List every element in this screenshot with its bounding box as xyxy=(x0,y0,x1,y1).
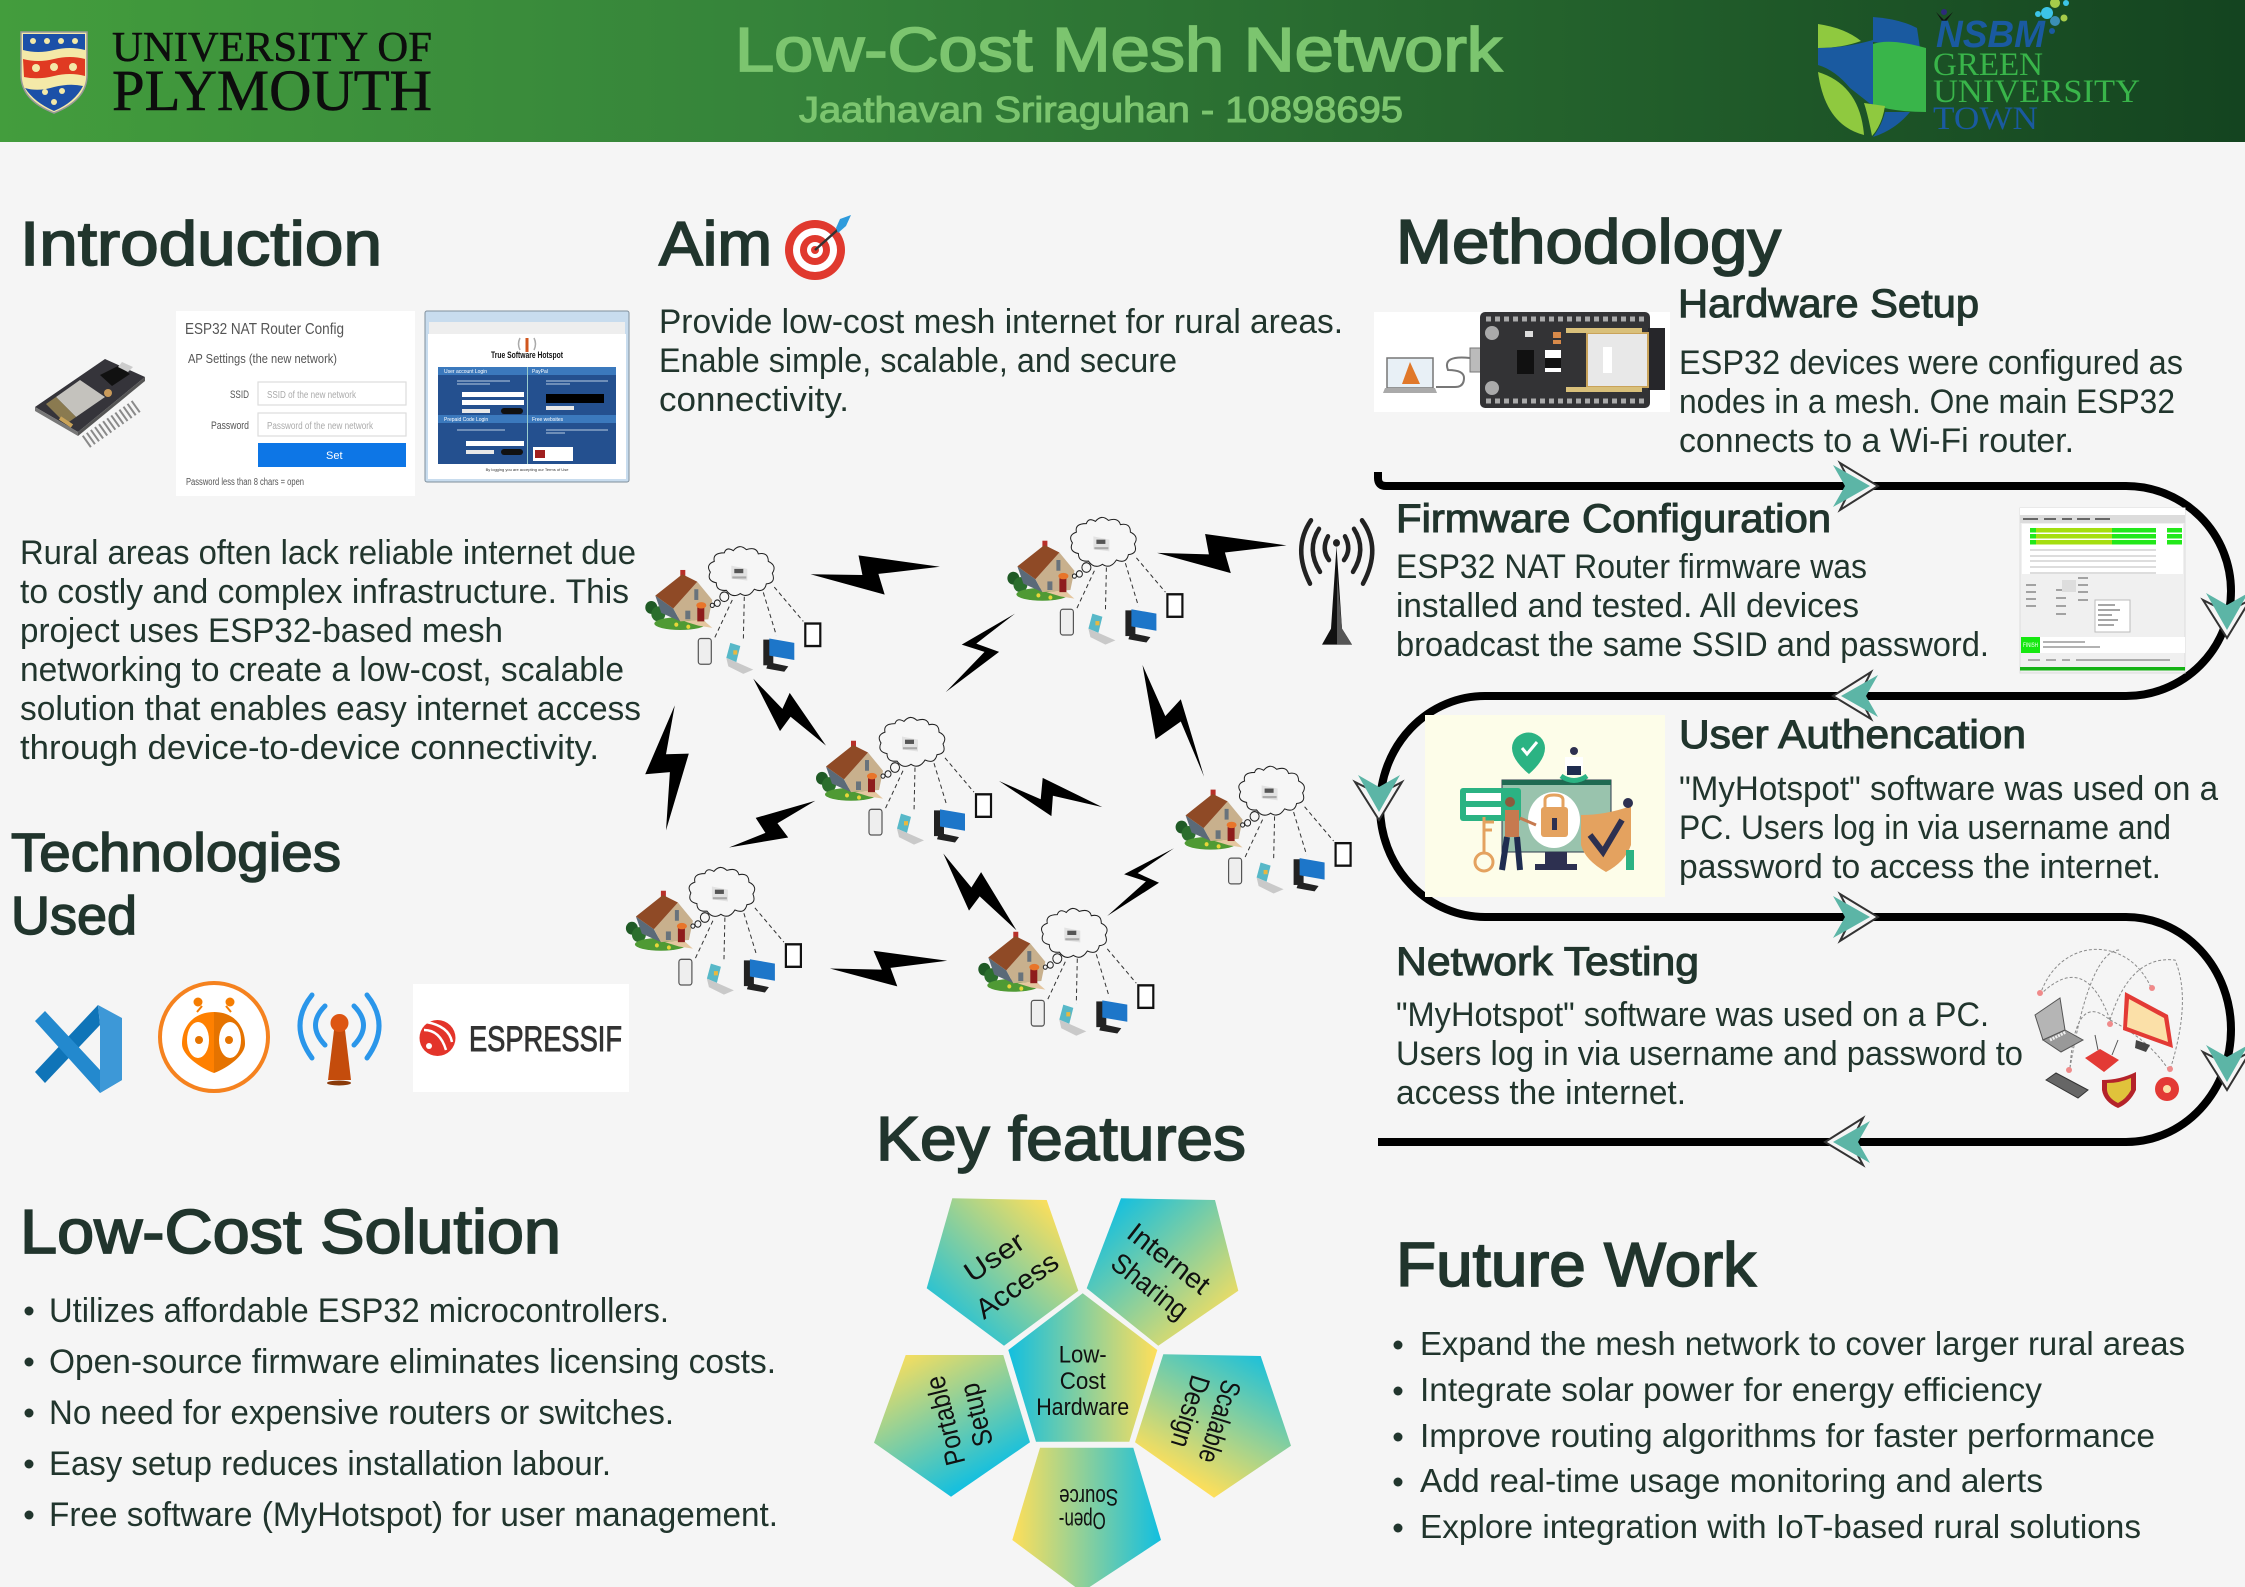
panel: aim xyxy=(659,210,1343,419)
text: hardware setup description: ESP32 devices were configured as xyxy=(1679,344,2183,382)
logo: NSBM Green University Town: TOWN xyxy=(1933,101,2038,137)
panel: introduction xyxy=(20,210,641,767)
arrow: left bottom xyxy=(1825,1118,1870,1165)
icon: Espressif logo xyxy=(413,984,629,1092)
image: MyHotspot login screenshot: Free websites xyxy=(532,417,564,423)
panel: methodology xyxy=(1355,208,2245,1165)
text: introduction paragraph xyxy=(20,534,641,767)
text: firmware description: installed and tested. All devices xyxy=(1396,587,1859,625)
text: hardware setup description xyxy=(1679,344,2183,460)
text: aim description: connectivity. xyxy=(659,381,849,419)
list: low-cost bullets: Easy setup reduces installation labour. xyxy=(49,1445,611,1483)
pentagon: Internet Sharing: Internet xyxy=(1121,1217,1216,1300)
step: firmware configuration xyxy=(1396,497,2185,673)
pentagon: Open-Source: Source xyxy=(1059,1483,1118,1510)
text: introduction paragraph: Rural areas often lack reliable internet due xyxy=(20,534,636,572)
text: network testing description: "MyHotspot" software was used on a PC. xyxy=(1396,996,1989,1034)
diagram: mesh network xyxy=(626,517,1372,1036)
text: user authentication description: PC. Users log in via username and xyxy=(1679,809,2171,847)
image: MyHotspot login screenshot: True Software Hotspot xyxy=(491,350,563,360)
icon: MyHotspot antenna xyxy=(300,995,379,1086)
list: future work bullets: Improve routing algorithms for faster performance xyxy=(1420,1417,2155,1454)
icon: radio tower xyxy=(1301,520,1372,645)
list: low-cost bullets: Free software (MyHotspot) for user management. xyxy=(49,1496,778,1534)
text: aim description: Enable simple, scalable, and secure xyxy=(659,342,1177,380)
text: introduction paragraph: project uses ESP32-based mesh xyxy=(20,612,503,650)
image: MyHotspot login screenshot: User account Login xyxy=(444,369,487,375)
arrow: left xyxy=(1833,672,1878,719)
text: user authentication description: "MyHotspot" software was used on a xyxy=(1679,770,2218,808)
pentagon: Portable Setup: Portable xyxy=(919,1373,971,1469)
text: introduction paragraph: through device-to-device connectivity. xyxy=(20,729,599,767)
panel: low-cost solution xyxy=(20,1198,778,1534)
arrow: down xyxy=(2203,593,2245,638)
logo text: University of Plymouth xyxy=(112,25,432,123)
image: laptop wired to ESP32 board xyxy=(1374,312,1670,412)
text: introduction paragraph: networking to create a low-cost, scalable xyxy=(20,651,624,689)
pentagon: Low-Cost Hardware: Low- xyxy=(1059,1342,1107,1369)
logo text: University of Plymouth: UNIVERSITY OF xyxy=(112,25,432,71)
image: ESP32 NAT Router config screenshot: ESP32 NAT Router Config xyxy=(185,321,344,338)
subtitle: author: Jaathavan Sriraguhan - 10898695 xyxy=(799,89,1403,130)
node 5 xyxy=(626,867,801,995)
pentagon: User Access: User xyxy=(958,1226,1030,1288)
header banner xyxy=(0,0,2245,142)
text: user authentication description xyxy=(1679,770,2218,886)
icon: VS Code xyxy=(35,1005,122,1093)
image: connected devices illustration xyxy=(2030,949,2182,1108)
image: ESP32 NAT Router config screenshot: Password less than 8 chars = open xyxy=(186,477,304,488)
list: low-cost bullets xyxy=(24,1292,778,1534)
text: network testing description: Users log in via username and password to xyxy=(1396,1035,2023,1073)
heading: Aim: Aim xyxy=(659,210,772,279)
pentagon: Scalable Design: Scalable xyxy=(1192,1376,1247,1467)
node 4 xyxy=(1176,766,1351,894)
image: flash download tool screenshot xyxy=(2020,508,2185,673)
text: network testing description xyxy=(1396,996,2023,1112)
heading: User Authencation: User Authencation xyxy=(1679,713,2026,757)
image: ESP32 NAT Router config screenshot: SSID of the new network xyxy=(267,390,357,401)
text: user authentication description: password to access the internet. xyxy=(1679,848,2161,886)
image: ESP32 NAT Router config screenshot: SSID xyxy=(230,389,249,401)
pentagon: Portable Setup: Setup xyxy=(954,1380,999,1450)
step: user authentication xyxy=(1425,713,2218,897)
logo: NSBM Green University Town: UNIVERSITY xyxy=(1933,74,2140,110)
image: MyHotspot login screenshot: By logging you are accepting our Terms of Use xyxy=(486,467,569,472)
heading: Methodology: Methodology xyxy=(1396,208,1781,277)
logo: NSBM Green University Town xyxy=(1818,0,2140,137)
pentagon: Portable Setup xyxy=(874,1355,1030,1497)
list: future work bullets: Integrate solar power for energy efficiency xyxy=(1420,1371,2042,1408)
arrow: right lower xyxy=(1833,894,1878,941)
flow line connecting steps xyxy=(1378,472,2231,1142)
text: hardware setup description: nodes in a mesh. One main ESP32 xyxy=(1679,383,2175,421)
heading: Key features: Key features xyxy=(876,1105,1246,1174)
arrow: down lower xyxy=(2203,1045,2245,1090)
heading: Low-Cost Solution: Low-Cost Solution xyxy=(20,1198,561,1267)
node 6 xyxy=(978,908,1153,1036)
icon: target xyxy=(785,215,851,280)
heading: Network Testing: Network Testing xyxy=(1396,940,1699,984)
list: future work bullets xyxy=(1394,1325,2185,1545)
pentagon: Low-Cost Hardware: Hardware xyxy=(1036,1394,1129,1421)
text: firmware description: ESP32 NAT Router firmware was xyxy=(1396,548,1867,586)
image: MyHotspot login screenshot: PayPal xyxy=(532,369,548,375)
text: introduction paragraph: to costly and complex infrastructure. This xyxy=(20,573,629,611)
image: flash download tool screenshot: FINISH xyxy=(2023,643,2038,649)
pentagon: Scalable Design: Design xyxy=(1165,1372,1216,1452)
text: firmware description: broadcast the same SSID and password. xyxy=(1396,626,1989,664)
pentagon: Open-Source xyxy=(1012,1448,1161,1587)
pentagon: Internet Sharing: Sharing xyxy=(1105,1247,1194,1326)
heading: Technologies Used: Technologies xyxy=(11,823,341,883)
node 2 xyxy=(1007,517,1182,645)
list: future work bullets: Add real-time usage monitoring and alerts xyxy=(1420,1462,2043,1499)
icon: Espressif logo: ESPRESSIF xyxy=(469,1020,622,1059)
text: aim description: Provide low-cost mesh internet for rural areas. xyxy=(659,303,1343,341)
text: firmware description xyxy=(1396,548,1989,664)
image: ESP32 NAT Router config screenshot: Password of the new network xyxy=(267,421,374,432)
image: ESP32 NAT Router config screenshot: Set xyxy=(326,450,343,462)
pentagon: Scalable Design xyxy=(1135,1354,1291,1498)
node 3 xyxy=(816,717,991,845)
icon: PlatformIO xyxy=(160,983,268,1091)
panel: technologies used xyxy=(11,823,629,1093)
image: login security illustration xyxy=(1425,715,1665,897)
image: ESP32 NAT Router config screenshot xyxy=(176,311,415,496)
heading: Hardware Setup: Hardware Setup xyxy=(1678,282,1979,326)
heading: Technologies Used xyxy=(11,823,341,946)
node 1 xyxy=(645,547,820,674)
step: hardware setup xyxy=(1374,282,2183,460)
image: ESP board xyxy=(35,359,145,442)
pentagon: Low-Cost Hardware: Cost xyxy=(1060,1368,1106,1395)
list: future work bullets: Explore integration with IoT-based rural solutions xyxy=(1420,1508,2141,1545)
icon: University of Plymouth shield xyxy=(21,32,87,113)
list: low-cost bullets: No need for expensive routers or switches. xyxy=(49,1394,674,1432)
heading: Introduction: Introduction xyxy=(20,210,382,279)
logo text: University of Plymouth: PLYMOUTH xyxy=(112,58,432,123)
pentagon: User Access xyxy=(927,1198,1078,1346)
text: network testing description: access the internet. xyxy=(1396,1074,1686,1112)
image: ESP32 NAT Router config screenshot: AP Settings (the new network) xyxy=(188,351,337,366)
list: low-cost bullets: Open-source firmware eliminates licensing costs. xyxy=(49,1343,776,1381)
panel: future work xyxy=(1394,1231,2185,1545)
text: hardware setup description: connects to a Wi-Fi router. xyxy=(1679,422,2074,460)
pentagon: Low-Cost Hardware xyxy=(1008,1293,1157,1442)
logo: NSBM Green University Town: GREEN xyxy=(1933,47,2043,83)
heading: Technologies Used: Used xyxy=(11,886,137,946)
list: future work bullets: Expand the mesh network to cover larger rural areas xyxy=(1420,1325,2185,1362)
title: Low-Cost Mesh Network xyxy=(735,16,1503,85)
arrow: down on left turn xyxy=(1355,775,1402,820)
image: ESP32 NAT Router config screenshot: Password xyxy=(211,420,249,432)
text: introduction paragraph: solution that enables easy internet access xyxy=(20,690,641,728)
logo: NSBM Green University Town: NSBM xyxy=(1936,14,2046,56)
pentagon: Internet Sharing xyxy=(1087,1198,1238,1346)
lightning links xyxy=(645,534,1286,986)
panel: key features xyxy=(874,1105,1291,1587)
list: low-cost bullets: Utilizes affordable ESP32 microcontrollers. xyxy=(49,1292,669,1330)
heading: Future Work: Future Work xyxy=(1396,1231,1757,1300)
text: aim description xyxy=(659,303,1343,419)
image: MyHotspot login screenshot xyxy=(425,311,629,482)
pentagon: Open-Source: Open- xyxy=(1059,1506,1106,1533)
step: network testing xyxy=(1396,940,2182,1112)
pentagon: User Access: Access xyxy=(969,1246,1064,1325)
heading: Firmware Configuration: Firmware Configuration xyxy=(1396,497,1831,541)
image: MyHotspot login screenshot: Prepaid Code Login xyxy=(444,417,488,423)
arrow: right xyxy=(1833,463,1878,510)
